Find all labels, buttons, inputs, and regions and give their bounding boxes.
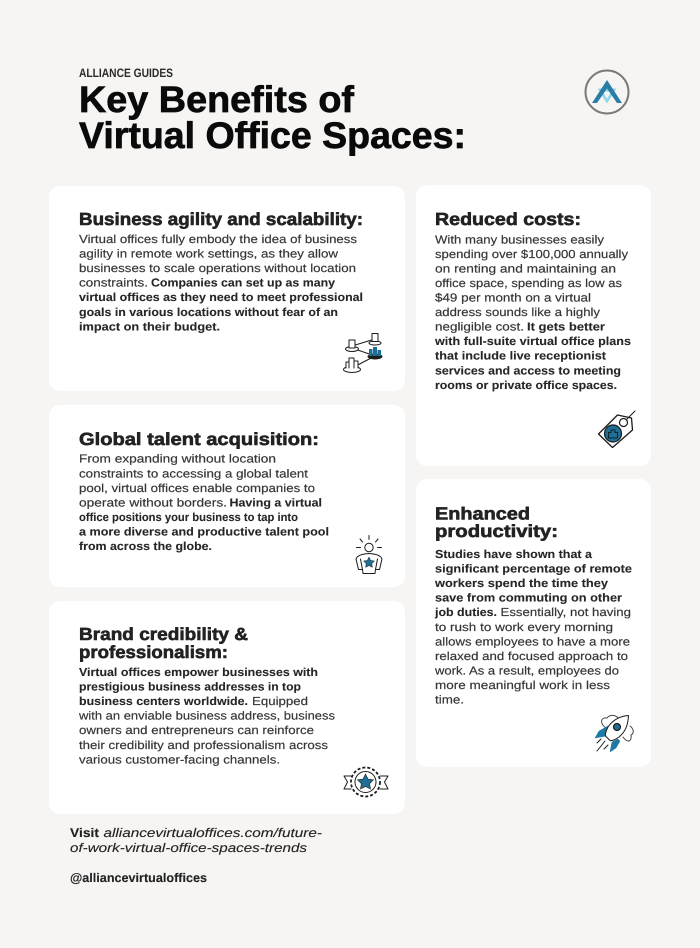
text block: enhanced productivity body: Studies have shown that a [435, 548, 593, 561]
panel: business agility and scalability [49, 186, 405, 391]
heading: business agility: Business agility and scalability: [79, 209, 363, 229]
text block: business agility body: agility in remote work settings, as they allow [79, 248, 339, 261]
text block: enhanced productivity body: time. [435, 694, 464, 706]
icon: Alliance logo [586, 70, 628, 114]
icon: rocket [595, 715, 633, 752]
title [79, 79, 466, 156]
text block: global talent body: Having a virtual [230, 496, 322, 509]
text block: enhanced productivity body: allows employees to have a more [435, 635, 630, 648]
eyebrow: Alliance Guides: ALLIANCE GUIDES [79, 66, 173, 80]
footer: source link: alliancevirtualoffices.com/future- [104, 826, 322, 840]
text block: brand credibility body: business centers worldwide. [79, 695, 248, 708]
text block: enhanced productivity body: save from commuting on other [435, 592, 623, 605]
text block: enhanced productivity body: to rush to work every morning [435, 621, 613, 634]
text block: business agility body: businesses to scale operations without location [79, 262, 356, 275]
footer: source link: of-work-virtual-office-spaces-trends [70, 841, 308, 855]
footer: source link [70, 826, 322, 855]
text block: reduced costs body: office space, spending as low as [435, 277, 622, 290]
text block: business agility body: impact on their budget. [79, 320, 220, 333]
text block: business agility body: virtual offices as they need to meet professional [79, 291, 363, 304]
icon: price tag [598, 411, 635, 448]
text block: reduced costs body: address sounds like a highly [435, 306, 600, 319]
text block: global talent body: from across the globe. [79, 540, 212, 553]
text block: brand credibility body: with an enviable business address, business [78, 710, 335, 723]
text block: brand credibility body [78, 666, 335, 766]
icon: network of buildings [344, 334, 382, 372]
text block: reduced costs body: services and access to meeting [435, 364, 621, 377]
panel: enhanced productivity [416, 479, 651, 767]
text block: reduced costs body: on renting and maintaining an [435, 262, 616, 275]
text block: global talent body: constraints to accessing a global talent [79, 467, 309, 480]
text block: enhanced productivity body: relaxed and focused approach to [435, 650, 628, 663]
text block: brand credibility body: Equipped [252, 695, 308, 708]
text block: reduced costs body: that include live receptionist [435, 350, 606, 363]
text block: business agility body: Companies can set up as many [151, 277, 336, 290]
heading: enhanced productivity [435, 504, 558, 541]
text block: business agility body: constraints. [79, 277, 148, 290]
text block: brand credibility body: prestigious business addresses in top [79, 681, 301, 694]
footer: social handle: @alliancevirtualoffices [70, 871, 207, 885]
panel: reduced costs [416, 185, 651, 466]
text block: reduced costs body [434, 233, 631, 392]
text block: business agility body: Virtual offices fully embody the idea of business [79, 233, 357, 246]
text block: brand credibility body: their credibility and professionalism across [79, 739, 328, 752]
text block: global talent body: From expanding without location [79, 453, 276, 466]
text block: enhanced productivity body: more meaningful work in less [435, 679, 610, 692]
text block: enhanced productivity body: job duties. [434, 606, 497, 619]
text block: business agility body: goals in various locations without fear of an [79, 306, 338, 319]
text block: global talent body: operate without borders. [79, 496, 227, 509]
text block: reduced costs body: rooms or private office spaces. [435, 379, 617, 392]
text block: reduced costs body: $49 per month on a virtual [435, 292, 591, 304]
text block: reduced costs body: spending over $100,000 annually [435, 248, 628, 261]
text block: enhanced productivity body: significant percentage of remote [435, 563, 633, 576]
heading: enhanced productivity: productivity: [435, 521, 558, 541]
text block: global talent body [79, 453, 329, 553]
heading: brand credibility: professionalism: [79, 642, 228, 662]
text block: brand credibility body: various customer-facing channels. [79, 753, 280, 766]
title: Virtual Office Spaces: [79, 115, 466, 156]
text block: global talent body: office positions your business to tap into [79, 511, 298, 524]
text block: brand credibility body: owners and entrepreneurs can reinforce [79, 724, 314, 737]
heading: reduced costs: Reduced costs: [435, 209, 581, 229]
icon: award badge [344, 768, 388, 796]
text block: business agility body [79, 233, 363, 333]
panel: global talent acquisition [49, 405, 405, 587]
text block: reduced costs body: With many businesses easily [435, 233, 604, 246]
footer: source link: Visit [70, 826, 100, 840]
text block: enhanced productivity body: Essentially, not having [500, 606, 631, 619]
icon: person with star [356, 536, 382, 574]
text block: global talent body: a more diverse and productive talent pool [79, 526, 329, 538]
panel: brand credibility and professionalism [49, 601, 405, 814]
heading: global talent: Global talent acquisition: [79, 429, 319, 449]
text block: global talent body: pool, virtual offices enable companies to [79, 482, 315, 495]
text block: reduced costs body: with full-suite virtual office plans [434, 335, 631, 348]
heading: brand credibility: Brand credibility & [79, 624, 248, 644]
text block: enhanced productivity body: workers spend the time they [434, 577, 609, 590]
text block: reduced costs body: negligible cost. [435, 321, 524, 334]
title: Key Benefits of [79, 79, 355, 120]
heading: enhanced productivity: Enhanced [435, 504, 530, 524]
text block: enhanced productivity body: work. As a result, employees do [434, 664, 619, 677]
text block: reduced costs body: It gets better [527, 321, 606, 334]
text block: enhanced productivity body [434, 548, 633, 706]
heading: brand credibility [79, 624, 248, 662]
text block: brand credibility body: Virtual offices empower businesses with [79, 666, 318, 679]
